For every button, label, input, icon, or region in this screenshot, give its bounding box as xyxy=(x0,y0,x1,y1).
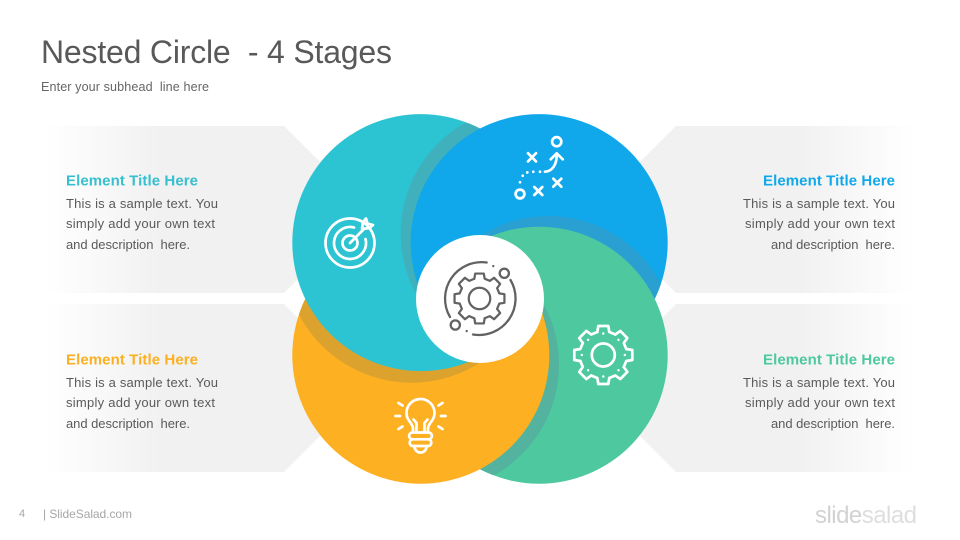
panel: bottom left: This is a sample text. You xyxy=(66,375,218,390)
nested circle diagram xyxy=(284,106,676,492)
panel: top left: and description here. xyxy=(66,237,190,252)
title: Nested Circle - 4 Stages xyxy=(41,34,392,70)
panel: top right: This is a sample text. You xyxy=(743,196,895,211)
panel: bottom right: Element Title Here xyxy=(763,352,895,368)
panel: bottom left: and description here. xyxy=(66,416,190,431)
icon: gear xyxy=(574,326,632,384)
panel: top right: and description here. xyxy=(771,237,895,252)
panel: bottom right xyxy=(592,304,915,472)
subhead: Enter your subhead line here xyxy=(41,80,209,94)
panel: bottom right: simply add your own text xyxy=(745,395,895,410)
panel: top right: Element Title Here xyxy=(763,172,895,190)
panel: top right: simply add your own text xyxy=(745,216,895,231)
icon: center gear with orbit xyxy=(445,262,516,335)
icon: strategy play xyxy=(516,137,563,198)
panel: bottom left: simply add your own text xyxy=(66,395,215,410)
panel: bottom left: Element Title Here xyxy=(66,352,198,368)
panel: top left: This is a sample text. You xyxy=(66,196,218,211)
panel: bottom right: and description here. xyxy=(771,416,895,431)
panel: bottom right: This is a sample text. You xyxy=(743,375,895,390)
panel: top right xyxy=(592,126,915,293)
logo: slidesalad xyxy=(815,502,917,529)
icon: light bulb xyxy=(396,399,446,452)
footer text: | SlideSalad.com xyxy=(43,507,132,521)
center white circle xyxy=(416,235,544,363)
page number: 4 xyxy=(19,508,25,520)
panel: top left xyxy=(45,126,368,293)
panel: top left: simply add your own text xyxy=(66,216,215,231)
panel: bottom left xyxy=(45,304,368,472)
icon: target xyxy=(326,218,374,268)
panel: top left: Element Title Here xyxy=(66,172,198,190)
